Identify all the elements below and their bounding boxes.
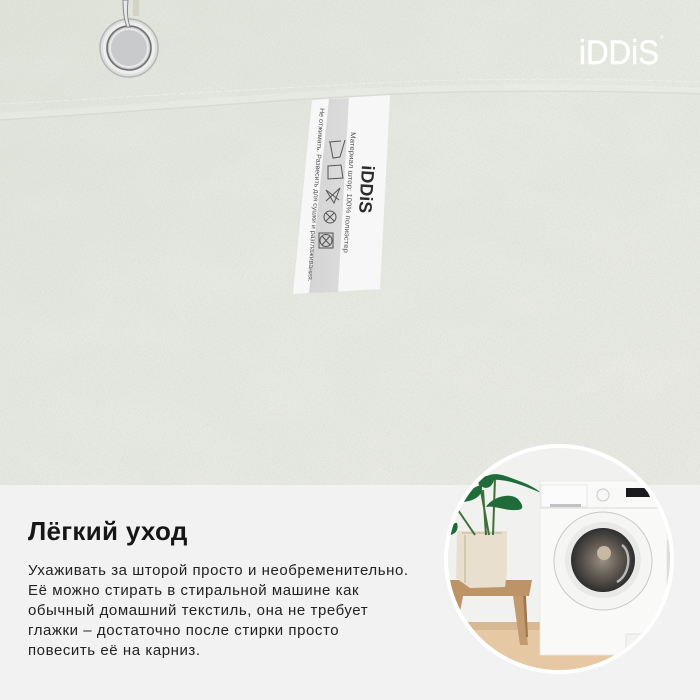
plant bbox=[458, 478, 495, 535]
body text: обычный домашний текстиль, она не требует bbox=[28, 602, 368, 619]
grommet with hook bbox=[100, 0, 158, 77]
body text: глажки – достаточно после стирки просто bbox=[28, 622, 339, 639]
bottom panel background bbox=[0, 485, 700, 700]
stool bbox=[450, 580, 532, 645]
logo: iddis: iDDiS bbox=[579, 34, 659, 72]
floor bbox=[468, 622, 540, 630]
label text: brand: iDDiS bbox=[355, 165, 378, 214]
care icons bbox=[319, 140, 345, 248]
logo: iddis: ® bbox=[660, 34, 664, 41]
washing machine body bbox=[540, 481, 667, 655]
body text bbox=[28, 562, 409, 659]
care label bbox=[293, 95, 390, 294]
body text: Ухаживать за шторой просто и необременительно. bbox=[28, 562, 409, 579]
label text: material: Материал штор: 100% полиэстер bbox=[342, 132, 356, 253]
bag bbox=[456, 531, 507, 588]
body text: Её можно стирать в стиральной машине как bbox=[28, 582, 359, 599]
door bbox=[554, 512, 652, 610]
label text: instructions: Не отжимать. Развесить для сушки и разглаживания. bbox=[306, 108, 325, 282]
fabric background bbox=[0, 0, 700, 486]
body text: повесить её на карниз. bbox=[28, 642, 201, 659]
circular photo: washing machine bbox=[440, 440, 681, 680]
heading: Лёгкий уход bbox=[28, 516, 188, 546]
